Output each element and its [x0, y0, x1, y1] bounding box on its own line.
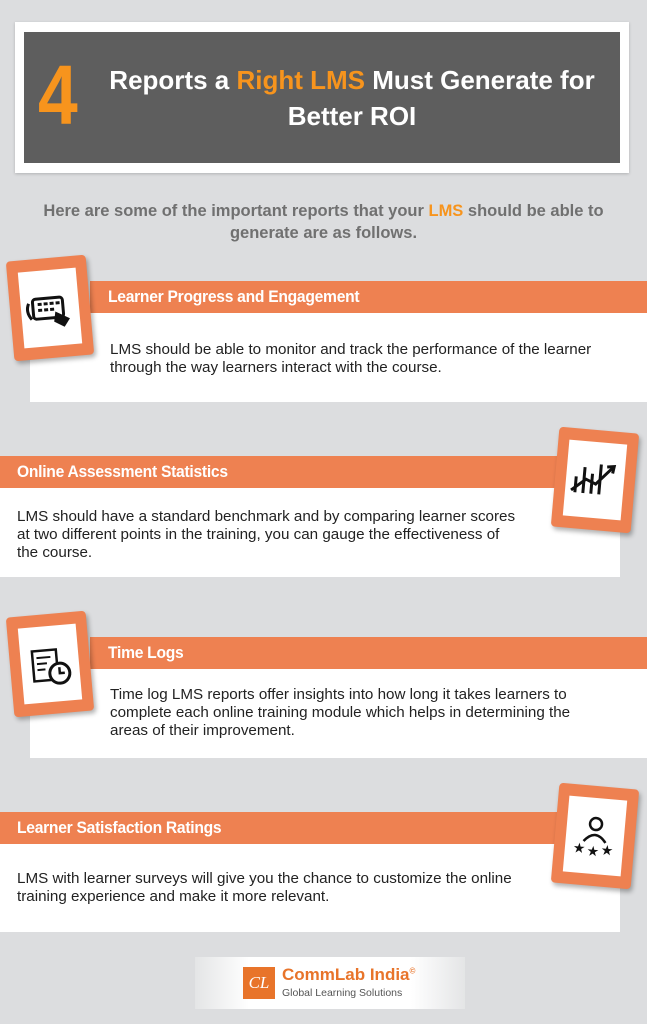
section 4: Learner Satisfaction Ratings: [17, 818, 221, 837]
logo: CL: [249, 973, 269, 992]
section 2: the course.: [17, 544, 92, 561]
section 2: Online Assessment Statistics: [17, 462, 228, 481]
logo: Global Learning Solutions: [282, 987, 402, 999]
subtitle: Here are some of the important reports that your LMS should be able to generate are as follows.: [43, 202, 604, 242]
logo: CommLab India©: [282, 965, 415, 984]
section 4: LMS with learner surveys will give you the chance to customize the online: [17, 870, 512, 887]
section 1: through the way learners interact with the course.: [110, 359, 442, 376]
logo: [195, 957, 465, 1009]
number 4: 4: [38, 48, 78, 142]
section 4: [0, 783, 643, 932]
section 2: [0, 427, 643, 577]
title panel: [15, 22, 629, 173]
section 1: LMS should be able to monitor and track the performance of the learner: [110, 341, 591, 358]
section 2: LMS should have a standard benchmark and by comparing learner scores: [17, 508, 515, 525]
section 3: Time log LMS reports offer insights into how long it takes learners to: [110, 686, 567, 703]
icon: person with stars: ★: [586, 843, 600, 860]
section 3: areas of their improvement.: [110, 722, 295, 739]
section 2: at two different points in the training, you can gauge the effectiveness of: [17, 526, 499, 543]
section 3: complete each online training module which helps in determining the: [110, 704, 570, 721]
section 4: training experience and make it more relevant.: [17, 888, 329, 905]
icon: person with stars: ★: [572, 840, 586, 857]
icon: chart: [551, 427, 639, 533]
icon: person with stars: [551, 783, 639, 889]
icon: document clock: [6, 611, 94, 717]
title text: Reports a Right LMS Must Generate for Better ROI: [109, 65, 595, 131]
section 3: [6, 611, 647, 758]
section 3: Time Logs: [108, 643, 183, 662]
icon: person with stars: ★: [600, 843, 614, 860]
section 1: [6, 255, 647, 402]
icon: keyboard hand: [6, 255, 94, 361]
section 1: Learner Progress and Engagement: [108, 287, 359, 306]
